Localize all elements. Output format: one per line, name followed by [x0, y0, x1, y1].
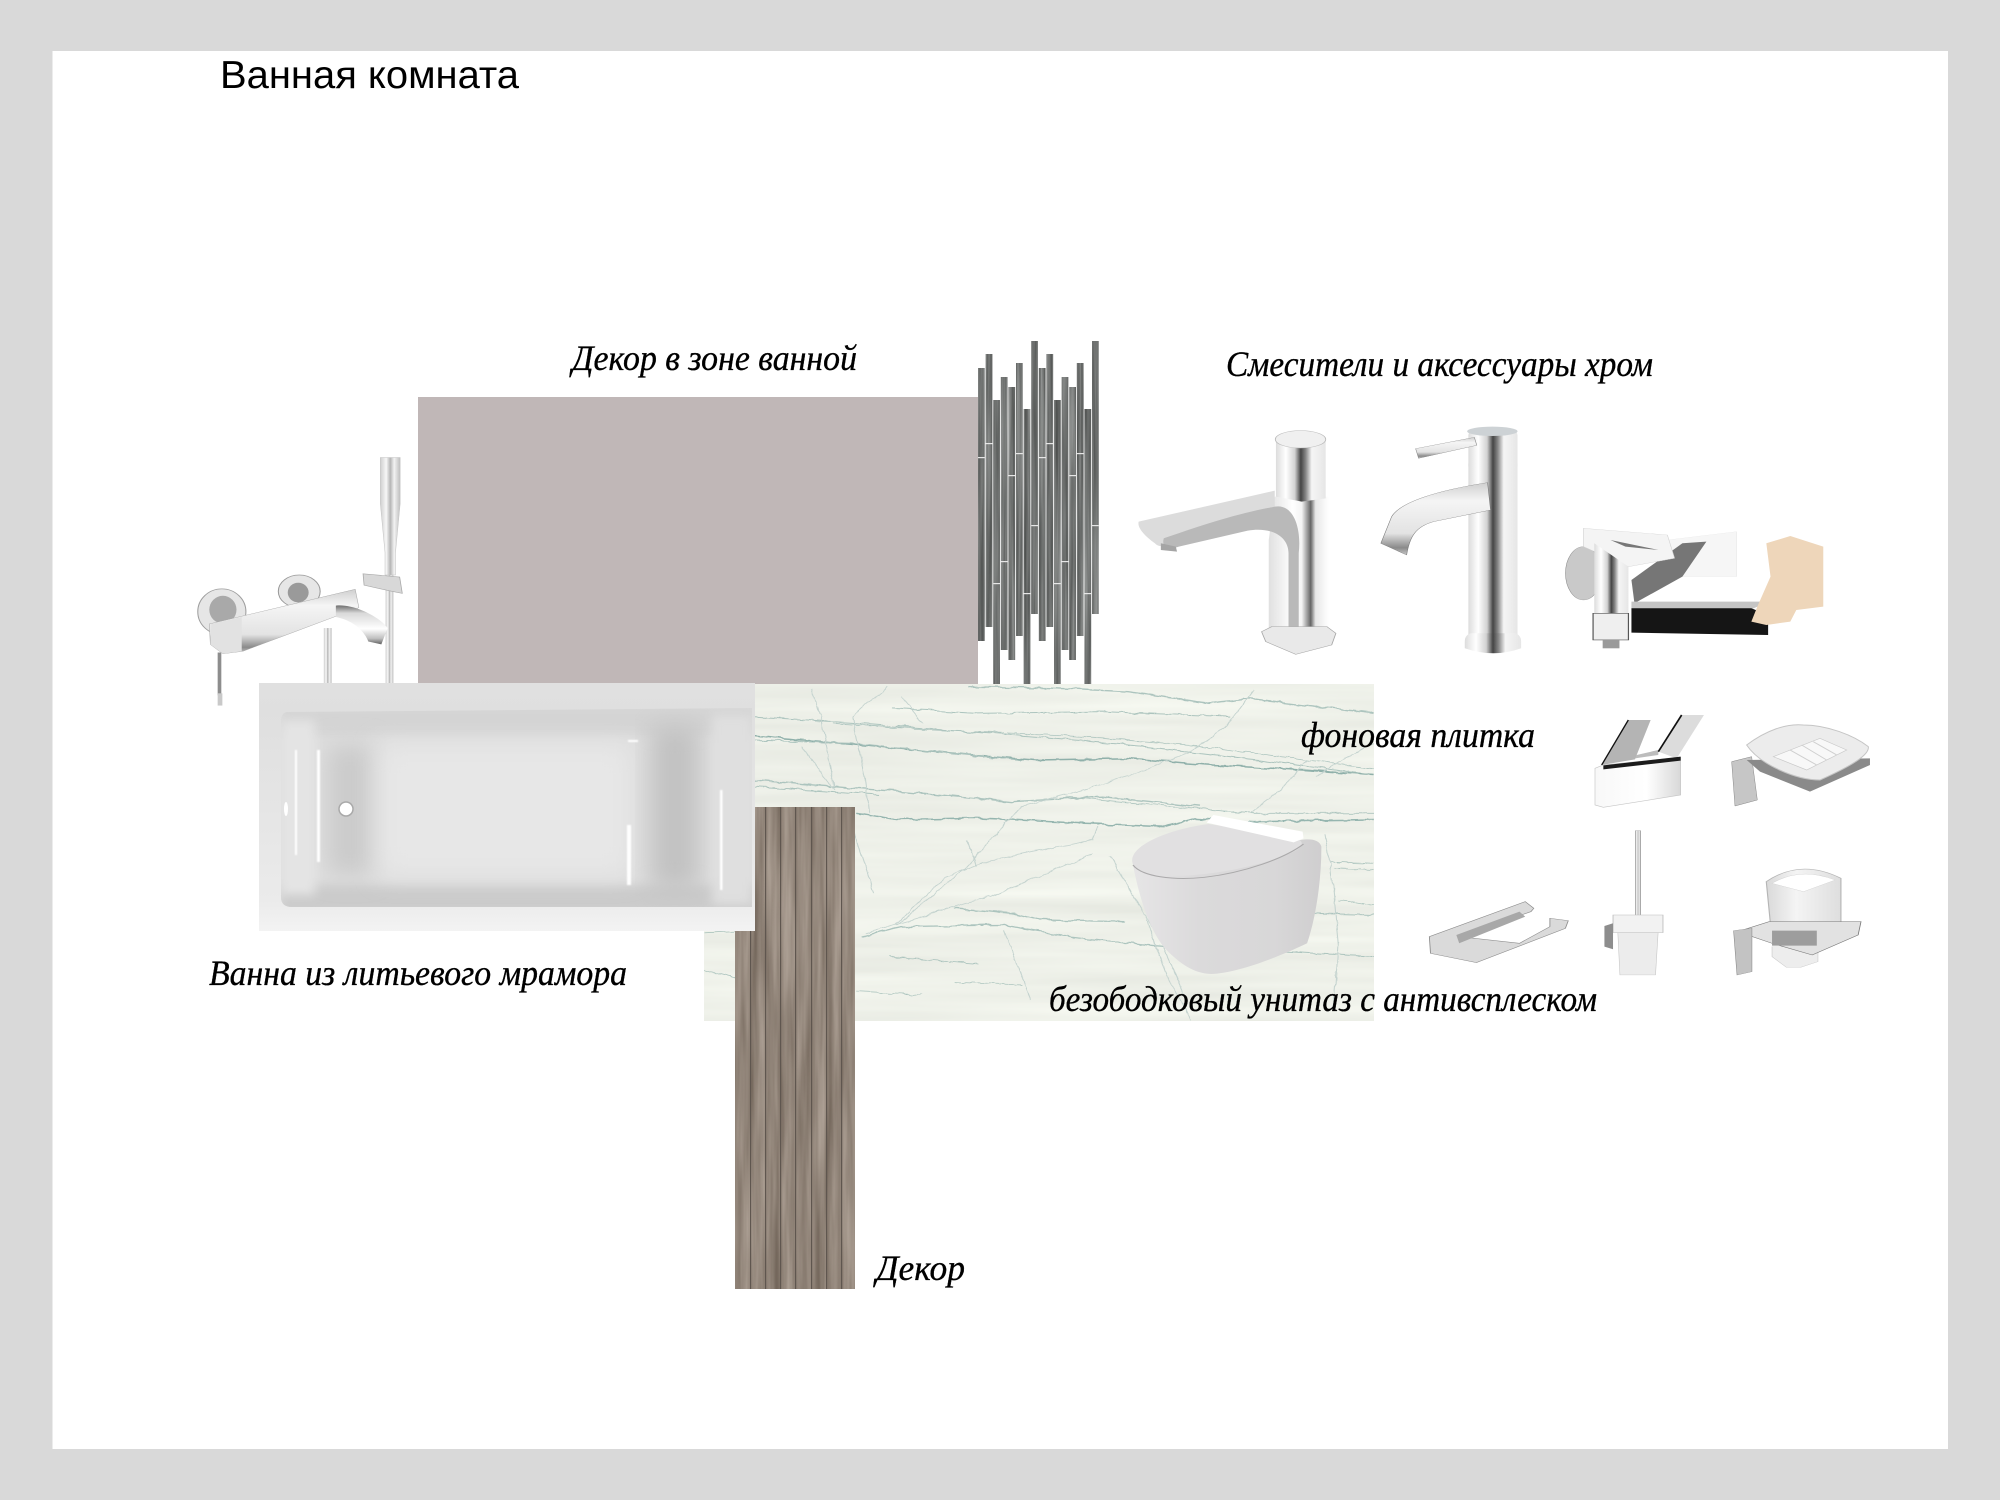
panel: marble background tile: [700, 680, 1380, 1025]
panel: mauve wall colour: [418, 397, 978, 684]
icon: basin mixer 1: [1138, 431, 1336, 654]
icon: bath mixer with hand: [1565, 528, 1823, 648]
caption: decor: Декор: [873, 1248, 965, 1288]
strip joints: [978, 443, 1099, 594]
marble veins: [704, 687, 1374, 1020]
tub reflections: [295, 740, 722, 890]
overflow: [284, 802, 288, 816]
panel: strip mosaic: [975, 335, 1105, 685]
title: Ванная комната: [220, 54, 519, 97]
icon: bathtub: [259, 683, 760, 931]
icon: rimless toilet: [1132, 815, 1321, 974]
icon: frosted glass holder: [1734, 869, 1861, 975]
caption: toilet: безободковый унитаз с антивсплеском: [1049, 979, 1597, 1019]
icon: basin mixer 2: [1381, 427, 1521, 653]
heading: mixers and accessories: Смесители и аксессуары хром: [1226, 344, 1653, 384]
caption: bath: Ванна из литьевого мрамора: [209, 953, 627, 993]
caption: background tile: фоновая плитка: [1301, 715, 1535, 755]
heading: decor in bath zone: Декор в зоне ванной: [569, 338, 857, 378]
icon: paper holder: [1429, 902, 1568, 963]
slat grooves: [750, 807, 842, 1289]
icon: soap dish: [1732, 725, 1870, 806]
panel: wood slat decor: [735, 807, 855, 1289]
icon: double hook: [1595, 715, 1704, 807]
tub well: [281, 708, 752, 907]
icon: shower and bath mixer: [198, 457, 402, 706]
drain: [339, 802, 353, 816]
icon: toilet brush: [1604, 831, 1663, 975]
